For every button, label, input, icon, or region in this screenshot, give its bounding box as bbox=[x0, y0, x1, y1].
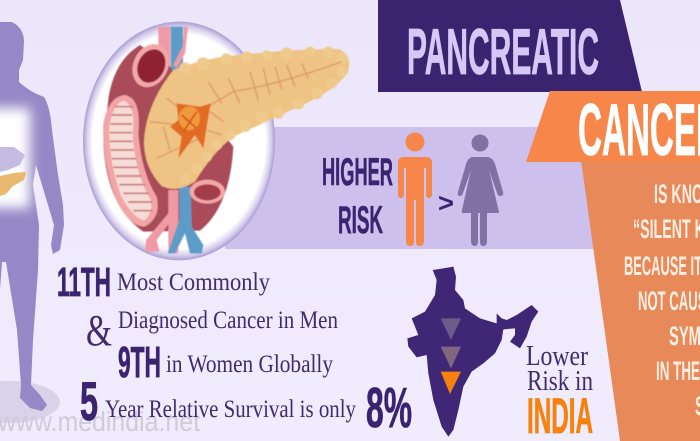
lobes bbox=[179, 47, 348, 184]
text block: rank statistics: Diagnosed Cancer in Men bbox=[118, 307, 338, 334]
ring vessel top bbox=[126, 38, 176, 93]
icon: greater than: > bbox=[438, 188, 454, 218]
blood vessels top bbox=[158, 27, 188, 70]
text block: survival statistic: 5 bbox=[80, 370, 98, 432]
text block: rank statistics: in Women Globally bbox=[166, 351, 333, 378]
panel: higher risk band bbox=[225, 127, 605, 249]
floor shadow bbox=[0, 381, 60, 423]
illustration: pancreas in circle bbox=[83, 22, 349, 260]
text block: survival statistic bbox=[80, 370, 412, 440]
human body silhouette bbox=[0, 22, 64, 423]
white disc bbox=[83, 22, 275, 260]
text block: survival statistic: 8% bbox=[366, 376, 412, 440]
icon: small pancreas bbox=[0, 172, 26, 196]
panel: orange description bbox=[581, 160, 700, 441]
text block: rank statistics: 11TH bbox=[57, 259, 111, 305]
icon: chevron orange bbox=[441, 372, 461, 394]
text block: rank statistics bbox=[57, 259, 338, 387]
heading: higher risk: RISK bbox=[338, 199, 383, 242]
text block: rank statistics: 9TH bbox=[118, 338, 161, 387]
text block: lower risk in india bbox=[526, 340, 593, 441]
icon: man bbox=[398, 132, 432, 246]
title: pancreatic banner bbox=[378, 0, 642, 92]
lower vessels bbox=[145, 187, 203, 253]
pancreas bbox=[144, 47, 349, 189]
tumour bbox=[170, 103, 211, 158]
ducts bbox=[150, 62, 342, 158]
silhouette bbox=[0, 22, 64, 411]
ring vessel bottom bbox=[190, 180, 225, 204]
torso glow bbox=[0, 108, 30, 208]
heading: higher risk bbox=[322, 151, 393, 242]
map: India bbox=[407, 267, 538, 437]
icon: woman bbox=[458, 134, 503, 246]
text block: survival statistic: Year Relative Survival is only bbox=[105, 396, 356, 423]
text block: rank statistics: & bbox=[86, 306, 112, 355]
icon: liver bbox=[0, 147, 25, 172]
text block: silent killer description bbox=[624, 179, 700, 421]
text: HIGHER bbox=[322, 151, 393, 194]
text block: lower risk in india: Risk in bbox=[527, 365, 593, 397]
icon: chevron top bbox=[441, 318, 461, 340]
text block: rank statistics: Most Commonly bbox=[117, 269, 270, 296]
organ backdrop bbox=[103, 45, 233, 232]
intestine bbox=[103, 95, 158, 227]
text block: lower risk in india: Lower bbox=[526, 340, 588, 372]
icon: chevron middle bbox=[441, 347, 461, 368]
watermark: www.medindia.net bbox=[0, 406, 200, 437]
